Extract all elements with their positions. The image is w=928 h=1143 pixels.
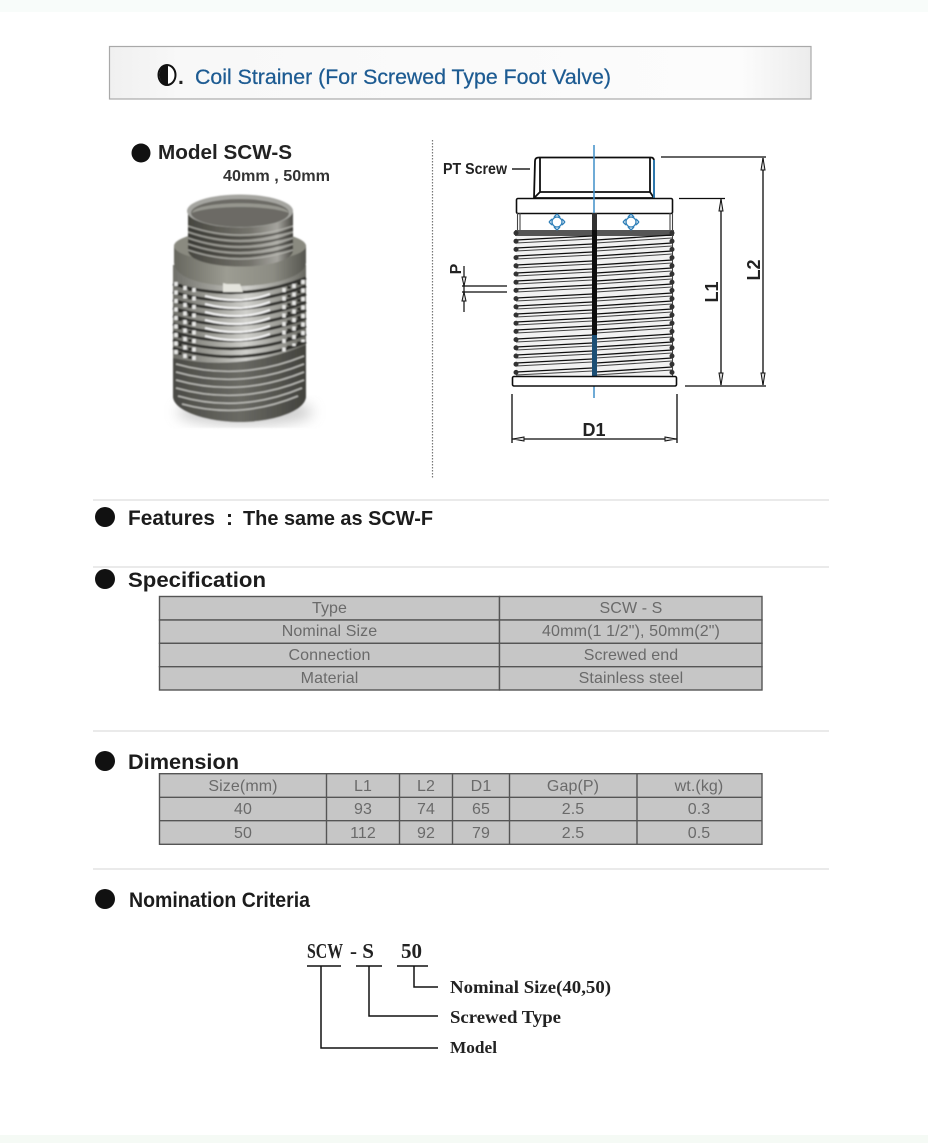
- strainer body: [173, 265, 306, 422]
- nomination diagram: 50: [401, 939, 422, 963]
- dimension heading: Dimension: [128, 751, 239, 774]
- dimension table: D1: [471, 778, 491, 795]
- top flange: [516, 198, 672, 214]
- dimension L2: [661, 157, 766, 386]
- dimension table: 93: [354, 801, 372, 818]
- title text: .: [178, 66, 184, 89]
- dotted divider: [432, 140, 434, 479]
- specification table: Nominal Size: [282, 623, 377, 640]
- specification table: 40mm(1 1/2"), 50mm(2"): [542, 623, 720, 640]
- dimension D1: D1: [582, 420, 606, 440]
- dimension table: 74: [417, 801, 435, 818]
- dimension table: 2.5: [562, 825, 584, 842]
- dimension table: 50: [234, 825, 252, 842]
- nomination diagram: Screwed Type: [450, 1007, 561, 1027]
- coil windings: [515, 230, 674, 377]
- features section: The same as SCW-F: [243, 508, 433, 530]
- features section: [95, 507, 433, 530]
- icon: half-filled circle: [158, 65, 176, 85]
- dimension table: 65: [472, 801, 490, 818]
- specification table: Connection: [289, 647, 370, 664]
- dimension P: [448, 263, 507, 312]
- nomination diagram: Model: [450, 1038, 497, 1057]
- specification table: Type: [312, 600, 347, 617]
- dimension table: wt.(kg): [674, 778, 723, 795]
- nomination diagram: - S: [350, 939, 374, 963]
- dimension L2: L2: [744, 259, 764, 281]
- dimension table: 2.5: [562, 801, 584, 818]
- dimension table: 0.5: [688, 825, 710, 842]
- centre spine: [592, 213, 597, 377]
- specification table: Screwed end: [584, 647, 678, 664]
- dimension L1: L1: [702, 281, 722, 303]
- dimension table: Size(mm): [208, 778, 278, 795]
- dimension table: 79: [472, 825, 490, 842]
- label: PT Screw: PT Screw: [443, 161, 507, 178]
- product photo: coil strainer: [173, 194, 313, 425]
- base ring: [512, 376, 676, 386]
- technical drawing: [443, 145, 766, 443]
- head with PT screw: [534, 158, 654, 198]
- dimension L1: [679, 198, 725, 385]
- dimension D1: [512, 394, 677, 443]
- model heading: [132, 142, 330, 185]
- dimension table: 92: [417, 825, 435, 842]
- specification table: Stainless steel: [579, 670, 683, 687]
- dimension table: L2: [417, 778, 435, 795]
- dimension table: 112: [350, 825, 376, 842]
- specification heading: Specification: [128, 569, 266, 592]
- title text: Coil Strainer (For Screwed Type Foot Valve): [195, 66, 611, 89]
- nomination diagram: SCW: [307, 939, 343, 963]
- nomination diagram: [307, 939, 611, 1057]
- specification table: Material: [301, 670, 358, 687]
- specification table: [160, 596, 762, 690]
- dimension P: P: [448, 263, 465, 274]
- dimension table: Gap(P): [547, 778, 599, 795]
- model heading: 40mm , 50mm: [223, 168, 330, 185]
- dimension table: L1: [354, 778, 372, 795]
- flange: [174, 230, 306, 292]
- features section: Features: [128, 507, 215, 530]
- nomination criteria heading: Nomination Criteria: [129, 889, 310, 912]
- side rods: [518, 213, 672, 377]
- model heading: Model SCW-S: [158, 142, 292, 164]
- dimension table: 0.3: [688, 801, 710, 818]
- features section: :: [226, 507, 233, 530]
- nomination diagram: Nominal Size(40,50): [450, 977, 611, 998]
- icons: weld symbols: [549, 214, 639, 230]
- title banner: [110, 46, 811, 99]
- dimension table: 40: [234, 801, 252, 818]
- threaded neck: [187, 194, 293, 266]
- specification table: SCW - S: [600, 600, 662, 617]
- dimension table: [160, 774, 762, 844]
- blue centre line: [593, 145, 595, 398]
